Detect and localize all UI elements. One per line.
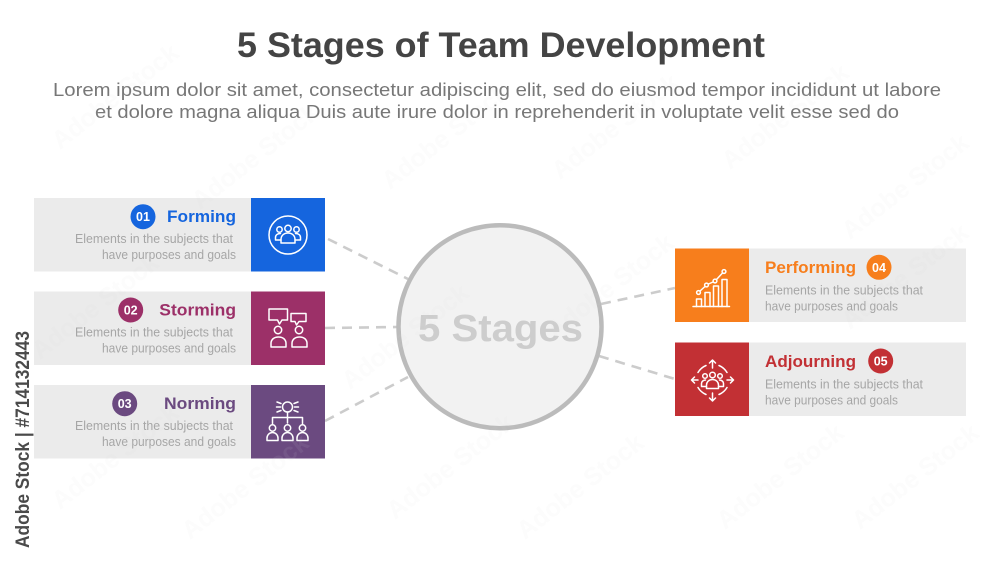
watermark: Adobe Stock bbox=[846, 419, 984, 535]
heading: Forming: Forming bbox=[167, 207, 236, 226]
icon: team in circle bbox=[269, 216, 307, 254]
watermark: Adobe Stock bbox=[541, 229, 679, 345]
watermark: Adobe Stock bbox=[381, 409, 519, 525]
watermark: Adobe Stock bbox=[26, 249, 164, 365]
watermark: Adobe Stock bbox=[711, 419, 849, 535]
badge 05 bbox=[868, 348, 893, 374]
icon: team hierarchy with idea bbox=[267, 402, 308, 440]
text: Adjourning description bbox=[765, 376, 923, 408]
heading: Performing: Performing bbox=[765, 258, 856, 277]
badge 05: 05 bbox=[874, 354, 888, 368]
panel: Forming bbox=[34, 198, 325, 272]
central circle: 5 Stages bbox=[418, 308, 583, 350]
connector: Performing to centre bbox=[601, 288, 675, 304]
connector: Forming to centre bbox=[328, 239, 408, 279]
title: 5 Stages of Team Development bbox=[237, 26, 765, 65]
text: Storming description bbox=[75, 324, 236, 356]
panel: Norming bbox=[34, 385, 325, 458]
watermark: Adobe Stock bbox=[546, 69, 684, 185]
badge 02: 02 bbox=[124, 304, 138, 318]
text: Storming description: have purposes and goals bbox=[102, 340, 236, 356]
icon: growth bar chart bbox=[693, 270, 730, 306]
vertical stock credit: Adobe Stock | #714132443 bbox=[13, 331, 34, 548]
badge 03 bbox=[112, 391, 137, 416]
badge 01: 01 bbox=[136, 210, 150, 224]
watermark: Adobe Stock bbox=[716, 59, 854, 175]
panel: Storming bbox=[34, 292, 325, 365]
icon: two people talking bbox=[269, 309, 307, 347]
text: Norming description: Elements in the subjects that bbox=[75, 418, 233, 433]
watermark: Adobe Stock bbox=[46, 399, 184, 515]
watermark: Adobe Stock bbox=[511, 429, 649, 545]
text: Forming description bbox=[75, 231, 236, 262]
heading: Norming: Norming bbox=[164, 394, 236, 413]
watermark: Adobe Stock bbox=[336, 279, 474, 395]
watermark: Adobe Stock bbox=[836, 219, 974, 335]
description text bbox=[53, 79, 941, 122]
heading: Adjourning: Adjourning bbox=[765, 352, 856, 371]
watermark: Adobe Stock bbox=[46, 39, 184, 155]
description text: Lorem ipsum dolor sit amet, consectetur adipiscing elit, sed do eiusmod tempor incididunt ut labore bbox=[53, 79, 941, 100]
text: Performing description: have purposes and goals bbox=[765, 298, 898, 314]
panel: Adjourning bbox=[675, 342, 966, 416]
badge 03: 03 bbox=[118, 397, 132, 411]
connector: Adjourning to centre bbox=[599, 356, 675, 379]
description text: et dolore magna aliqua Duis aute irure dolor in reprehenderit in voluptate velit esse sed do bbox=[95, 101, 899, 122]
text: Forming description: have purposes and goals bbox=[102, 247, 236, 262]
watermark: Adobe Stock bbox=[376, 79, 514, 195]
central circle bbox=[398, 225, 602, 428]
text: Norming description bbox=[75, 418, 236, 449]
panel: Performing bbox=[675, 248, 966, 322]
text: Forming description: Elements in the subjects that bbox=[75, 231, 233, 246]
icon: team with outward arrows bbox=[692, 360, 734, 401]
badge 04 bbox=[866, 255, 892, 280]
watermark: Adobe Stock bbox=[186, 99, 324, 215]
text: Performing description bbox=[765, 282, 923, 314]
text: Storming description: Elements in the subjects that bbox=[75, 324, 233, 340]
badge 01 bbox=[130, 204, 156, 229]
heading: Storming: Storming bbox=[159, 300, 236, 320]
connector: Storming to centre bbox=[325, 327, 397, 328]
badge 02 bbox=[118, 298, 143, 322]
text: Adjourning description: Elements in the subjects that bbox=[765, 376, 923, 392]
text: Adjourning description: have purposes and goals bbox=[765, 392, 898, 408]
text: Norming description: have purposes and goals bbox=[102, 434, 236, 449]
watermark: Adobe Stock bbox=[836, 129, 974, 245]
badge 04: 04 bbox=[872, 261, 886, 275]
connector: Norming to centre bbox=[325, 377, 408, 421]
watermark: Adobe Stock bbox=[176, 429, 314, 545]
text: Performing description: Elements in the subjects that bbox=[765, 282, 923, 298]
